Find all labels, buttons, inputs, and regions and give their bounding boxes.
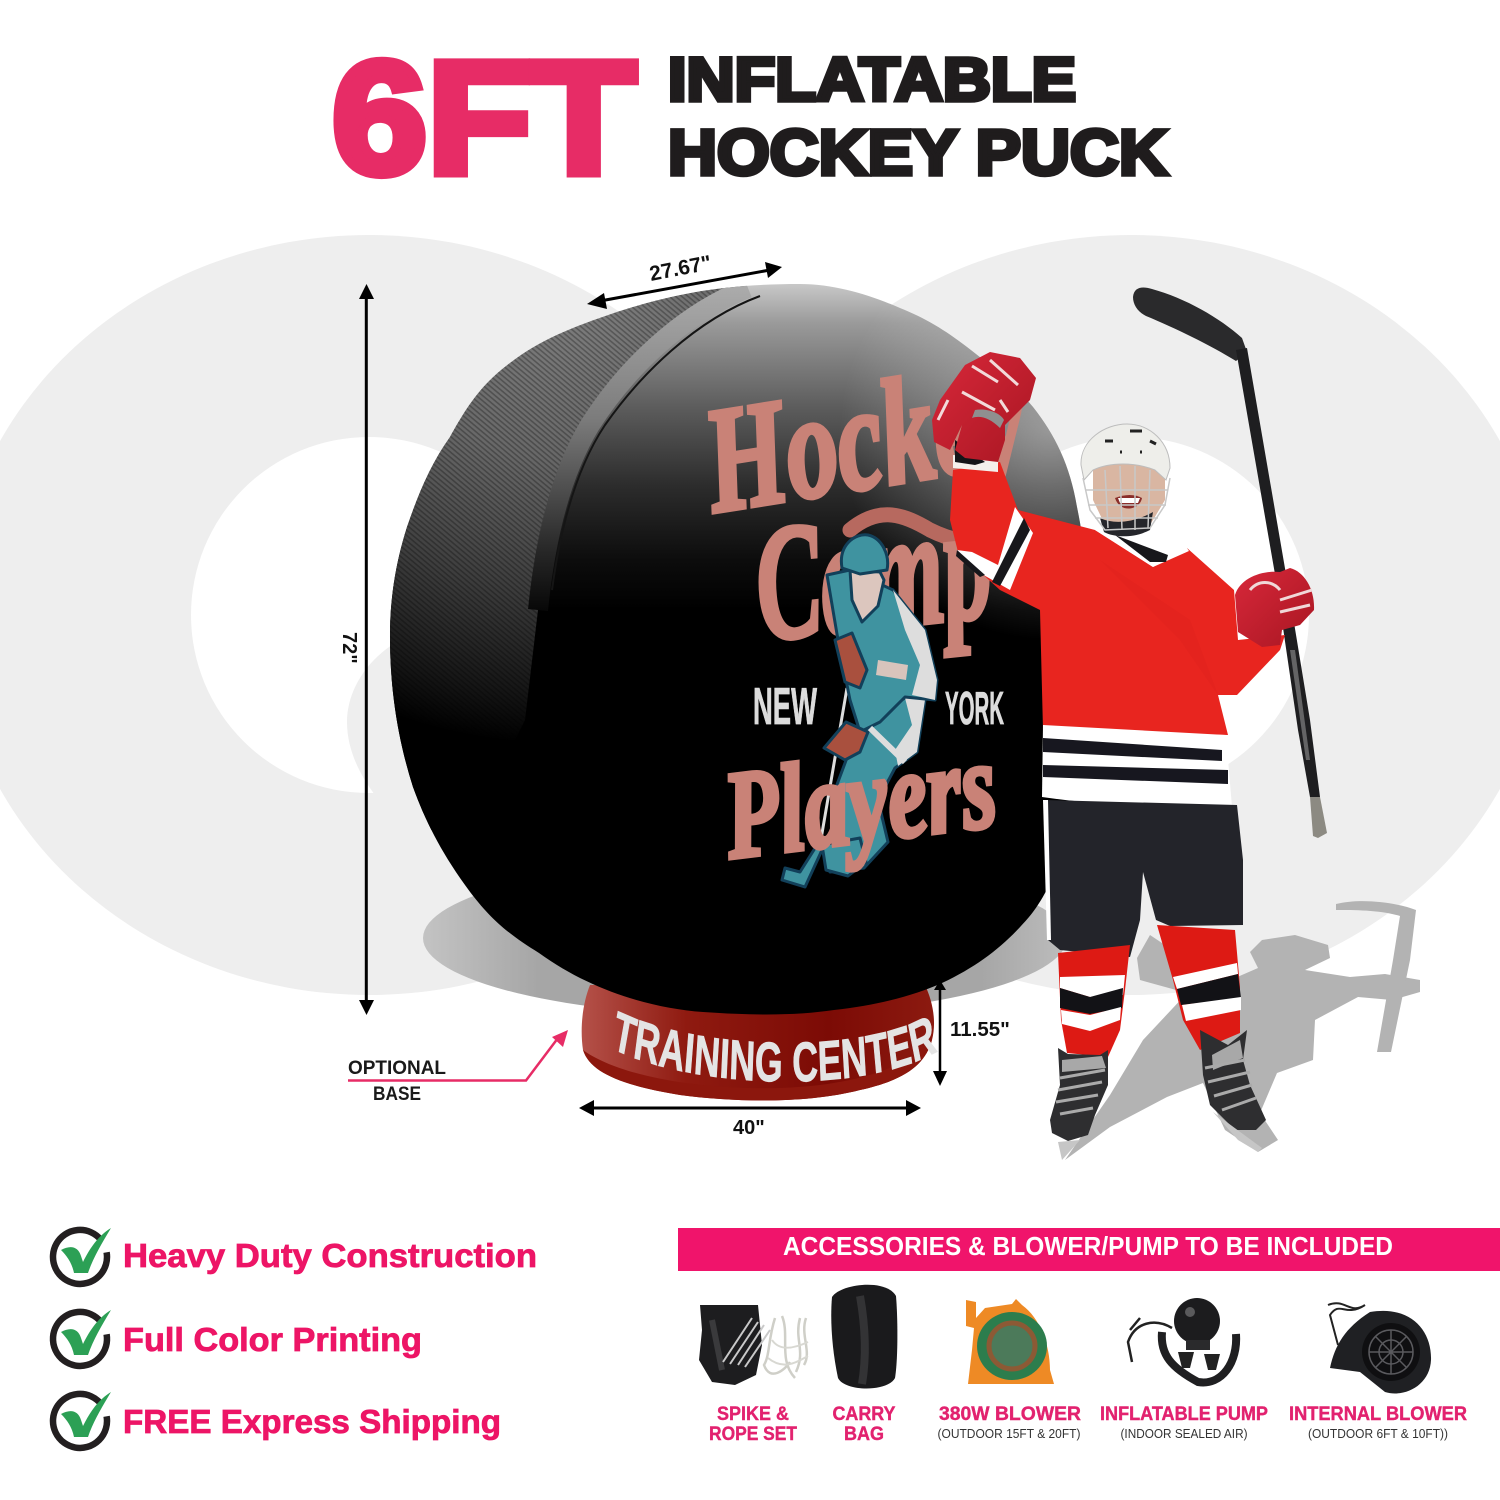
accessory: internal blower: (OUTDOOR 6FT & 10FT)) — [1308, 1426, 1448, 1441]
sleeve stripes — [956, 507, 1033, 590]
left skate — [1050, 1048, 1108, 1160]
feature: full color printing — [53, 1310, 422, 1366]
title: inflatable hockey puck: INFLATABLE — [668, 46, 1076, 114]
accessory: 380W blower: (OUTDOOR 15FT & 20FT) — [938, 1426, 1080, 1441]
dimension: base width 40 inches — [579, 1100, 921, 1139]
accessory: spike and rope set: SPIKE & — [717, 1404, 789, 1425]
player ground shadow — [1065, 901, 1420, 1160]
jersey hem stripes — [1042, 725, 1232, 808]
script lettering: Players: Players — [716, 716, 1003, 886]
puck side wall — [380, 280, 760, 830]
callout: optional base — [348, 1030, 568, 1105]
accessory: carry bag — [831, 1285, 897, 1445]
jersey — [950, 462, 1285, 735]
feature list — [53, 1228, 537, 1448]
right glove — [1235, 568, 1314, 647]
feature: full color printing: Full Color Printing — [123, 1322, 422, 1359]
base text: training center: TRAINING CENTER — [616, 1010, 938, 1082]
accessory: 380W blower: 380W BLOWER — [939, 1404, 1081, 1425]
accessory: inflatable pump: (INDOOR SEALED AIR) — [1120, 1426, 1248, 1441]
callout: optional base: BASE — [373, 1084, 421, 1105]
accessory: internal blower — [1289, 1303, 1467, 1441]
inflatable hockey puck — [380, 280, 1100, 1014]
logo: hockey player illustration — [782, 535, 937, 887]
accessory: spike and rope set — [699, 1305, 808, 1445]
script lettering: Camp: Camp — [747, 469, 999, 676]
optional inflatable base — [582, 985, 938, 1100]
accessories banner — [678, 1228, 1500, 1271]
right skate — [1200, 1030, 1266, 1152]
dimension: width 27.67 inches — [587, 251, 782, 309]
right sock — [1157, 925, 1241, 1050]
script swash — [850, 515, 990, 545]
dimension: height 72 inches — [338, 284, 374, 1015]
puck highlight — [864, 320, 1080, 623]
accessory: inflatable pump: INFLATABLE PUMP — [1100, 1404, 1268, 1425]
head and helmet — [1081, 424, 1189, 567]
title: 6FT: 6FT — [332, 28, 636, 207]
hockey stick — [1133, 288, 1327, 838]
accessory: carry bag: CARRY — [832, 1404, 896, 1425]
puck ground shadow — [423, 860, 1067, 1016]
accessory: inflatable pump — [1100, 1298, 1268, 1441]
accessory: internal blower: INTERNAL BLOWER — [1289, 1404, 1467, 1425]
accessories banner: ACCESSORIES & BLOWER/PUMP TO BE INCLUDED — [783, 1231, 1393, 1261]
feature: heavy duty construction — [53, 1228, 537, 1284]
inflatable hockey puck: YORK — [945, 682, 1004, 734]
dimension: base height 11.55 inches — [933, 980, 1010, 1086]
dimension: height 72 inches: 72" — [338, 632, 360, 664]
feature: heavy duty construction: Heavy Duty Construction — [123, 1238, 537, 1275]
title: inflatable hockey puck: HOCKEY PUCK — [668, 116, 1168, 188]
callout: optional base: OPTIONAL — [348, 1058, 446, 1079]
dimension: width 27.67 inches: 27.67" — [648, 251, 713, 286]
dimension: base height 11.55 inches: 11.55" — [950, 1018, 1010, 1041]
dimension: base width 40 inches: 40" — [733, 1117, 765, 1139]
glove cuff — [953, 455, 998, 472]
title: inflatable hockey puck — [668, 46, 1168, 188]
logo text: new: NEW — [753, 678, 817, 736]
puck seam band — [538, 288, 748, 610]
hockey player — [932, 288, 1327, 1160]
background: two grey rings — [0, 235, 1500, 995]
script lettering: Hockey: Hockey — [692, 330, 1036, 545]
accessory: carry bag: BAG — [844, 1424, 884, 1445]
shorts — [1043, 800, 1243, 957]
feature: free express shipping — [53, 1392, 501, 1448]
feature: free express shipping: FREE Express Shipping — [123, 1404, 501, 1441]
left sock — [1058, 945, 1130, 1057]
raised glove — [932, 352, 1036, 465]
accessory: spike and rope set: ROPE SET — [709, 1424, 797, 1445]
accessory: 380W blower — [938, 1299, 1081, 1441]
